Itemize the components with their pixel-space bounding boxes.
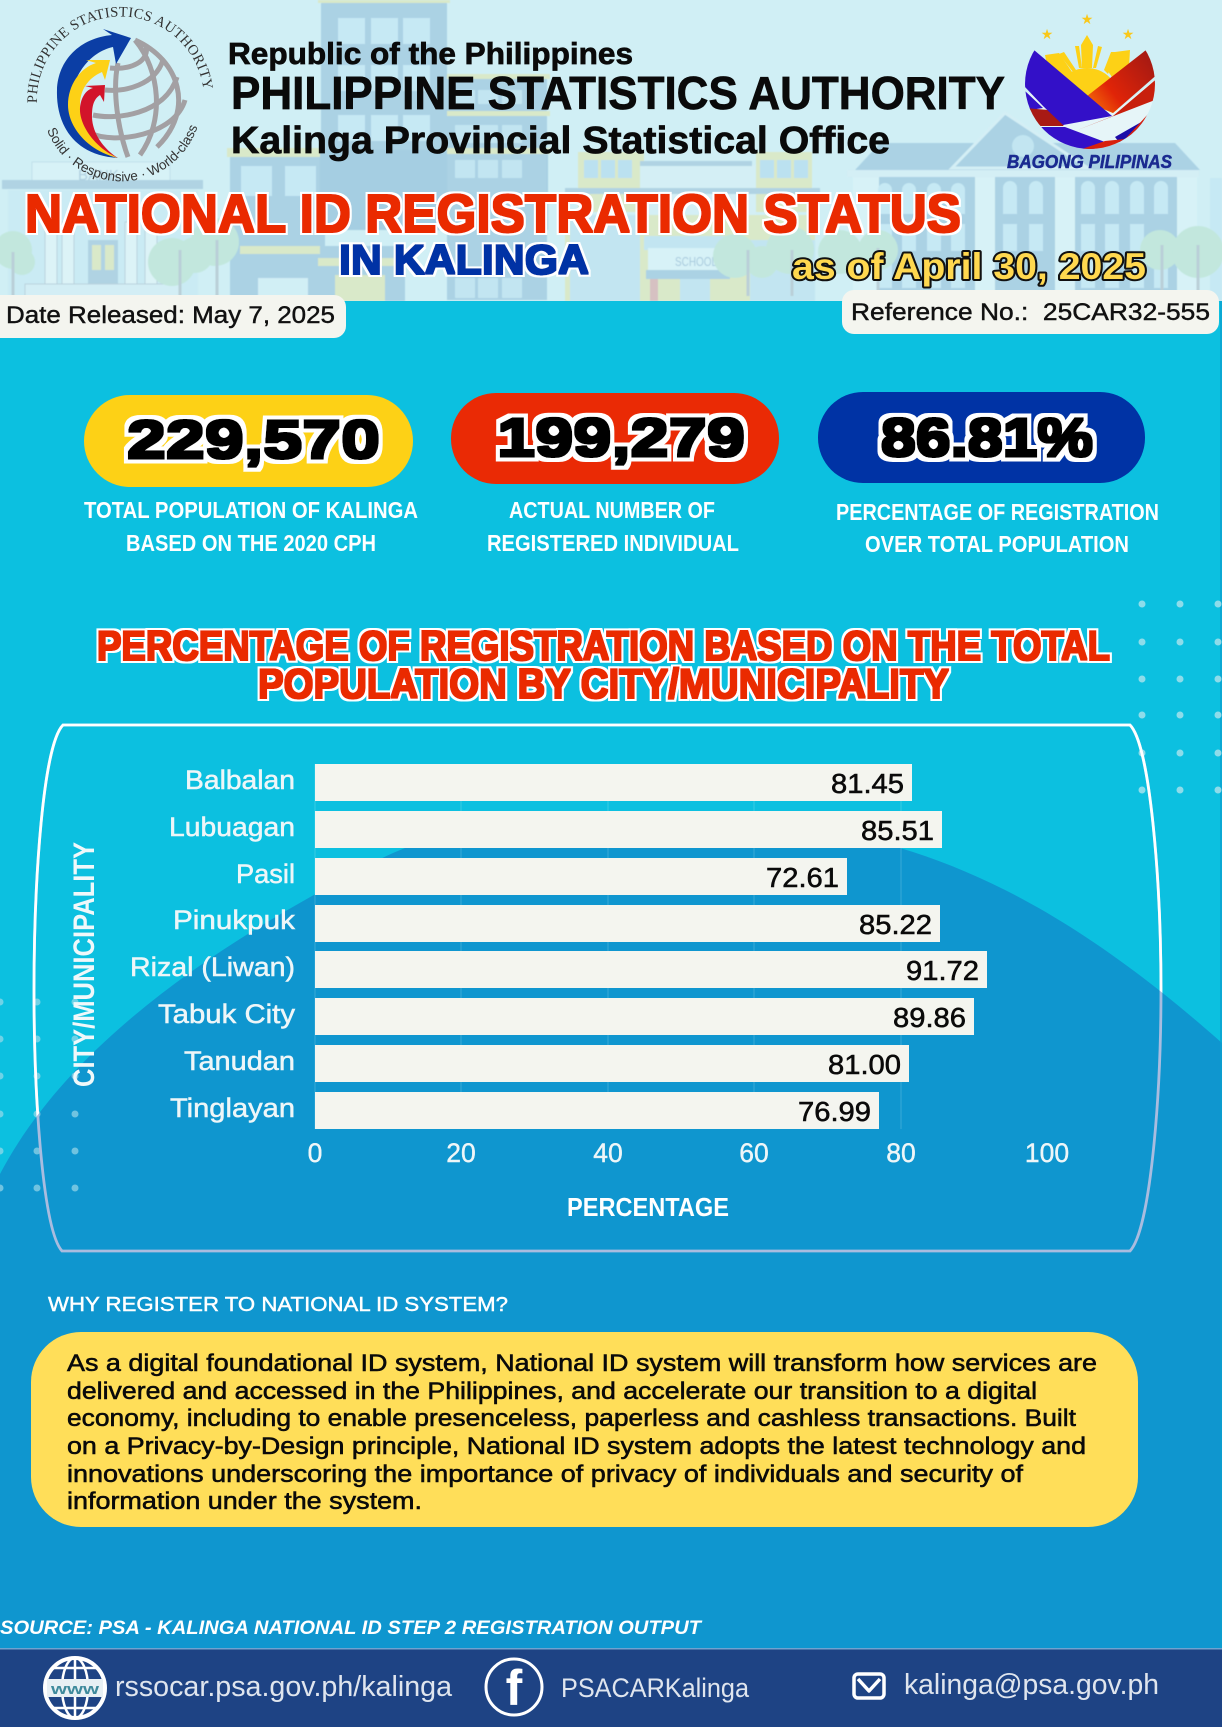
bar values: 85.22 xyxy=(859,909,932,940)
caption xyxy=(836,499,1159,557)
caption xyxy=(487,497,739,556)
icon: globe xyxy=(45,1658,105,1718)
value: 199,279 xyxy=(497,408,745,468)
callout text: delivered and accessed in the Philippines, and accelerate our transition to a digital xyxy=(67,1378,1037,1405)
background dome xyxy=(0,827,1222,1727)
x axis title: PERCENTAGE xyxy=(567,1192,729,1222)
bank xyxy=(2,162,203,300)
office line: Kalinga Provincial Statistical Office xyxy=(231,120,890,162)
grid lines xyxy=(315,764,901,1129)
stars xyxy=(1041,11,1134,42)
header city skyline background xyxy=(0,0,1222,301)
middle tower xyxy=(240,74,550,301)
bank: BANK xyxy=(78,167,119,184)
x axis ticks: 0 xyxy=(308,1138,322,1168)
callout text xyxy=(67,1350,1097,1515)
republic line: Republic of the Philippines xyxy=(228,36,633,71)
callout text: economy, including to enable presenceless, paperless and cashless transactions. Built xyxy=(67,1405,1076,1432)
stars: ★ xyxy=(1081,11,1093,27)
bands xyxy=(1025,50,1155,149)
value: 86.81% xyxy=(881,408,1093,468)
pill xyxy=(818,392,1145,483)
callout text: information under the system. xyxy=(67,1488,422,1515)
category labels xyxy=(130,765,296,1123)
callout text: innovations underscoring the importance of privacy of individuals and security of xyxy=(67,1461,1023,1488)
caption: REGISTERED INDIVIDUAL xyxy=(487,530,739,556)
x axis ticks: 20 xyxy=(446,1138,476,1168)
stat: percentage registered xyxy=(818,392,1159,557)
value: 229,570 xyxy=(127,410,380,470)
category labels: Pasil xyxy=(236,859,295,889)
pill xyxy=(84,395,413,487)
logo globe xyxy=(90,40,185,157)
agency line: PHILIPPINE STATISTICS AUTHORITY xyxy=(231,67,1005,119)
x axis ticks xyxy=(308,1138,1069,1168)
reference number pill: Reference No.: 25CAR32-555 xyxy=(851,299,1210,326)
caption: ACTUAL NUMBER OF xyxy=(509,497,715,523)
Bagong Pilipinas logo xyxy=(1007,11,1172,172)
icon: globe: www xyxy=(50,1681,99,1698)
why register heading: WHY REGISTER TO NATIONAL ID SYSTEM? xyxy=(48,1293,508,1316)
x axis ticks: 40 xyxy=(593,1138,623,1168)
caption: TOTAL POPULATION OF KALINGA xyxy=(84,497,418,523)
decorative dots right xyxy=(1138,600,1222,794)
pill xyxy=(451,393,779,484)
caption: OVER TOTAL POPULATION xyxy=(865,531,1129,557)
x axis ticks: 100 xyxy=(1025,1138,1069,1168)
caption: BASED ON THE 2020 CPH xyxy=(126,530,376,556)
stars: ★ xyxy=(1122,26,1134,42)
bar values: 81.00 xyxy=(828,1049,901,1080)
caption: PERCENTAGE OF REGISTRATION xyxy=(836,499,1159,525)
stat: total population xyxy=(84,395,418,556)
caption xyxy=(84,497,418,556)
footer bar xyxy=(0,1648,1222,1727)
school xyxy=(565,152,820,301)
chart heading: POPULATION BY CITY/MUNICIPALITY xyxy=(258,660,949,707)
subtitle: IN KALINGA xyxy=(339,236,589,283)
reference number pill xyxy=(842,290,1219,334)
callout box xyxy=(31,1332,1138,1527)
bar values: 91.72 xyxy=(906,955,979,986)
chart frame xyxy=(34,725,1161,1251)
icon: facebook: f xyxy=(506,1660,523,1716)
category labels: Pinukpuk xyxy=(173,905,296,935)
as-of date: as of April 30, 2025 xyxy=(792,246,1146,287)
bar values xyxy=(766,768,979,1127)
header text xyxy=(228,36,1005,162)
x axis ticks: 80 xyxy=(886,1138,916,1168)
main title: NATIONAL ID REGISTRATION STATUS xyxy=(25,184,961,244)
website: rssocar.psa.gov.ph/kalinga xyxy=(115,1671,453,1703)
bars xyxy=(315,764,987,1129)
sun xyxy=(1045,35,1130,132)
category labels: Balbalan xyxy=(185,765,295,795)
bar values: 81.45 xyxy=(831,768,904,799)
category labels: Tanudan xyxy=(184,1046,295,1076)
facebook handle: PSACARKalinga xyxy=(561,1673,750,1703)
PSA logo xyxy=(27,6,213,182)
why register callout xyxy=(31,1332,1138,1527)
logo arrows xyxy=(57,29,131,158)
callout text: on a Privacy-by-Design principle, National ID system adopts the latest technology and xyxy=(67,1433,1086,1460)
category labels: Tabuk City xyxy=(158,999,296,1029)
bar values: 89.86 xyxy=(893,1002,966,1033)
x axis ticks: 60 xyxy=(739,1138,769,1168)
bar values: 76.99 xyxy=(798,1096,871,1127)
right page edge xyxy=(1220,301,1222,1648)
chart heading xyxy=(97,622,1110,707)
icon: mail xyxy=(854,1674,884,1698)
callout text: As a digital foundational ID system, National ID system will transform how services are xyxy=(67,1350,1097,1377)
logo circular text: PHILIPPINE STATISTICS AUTHORITY xyxy=(27,6,213,103)
school: SCHOOL xyxy=(675,254,717,269)
decorative dots left xyxy=(0,998,78,1192)
icon: facebook xyxy=(486,1659,542,1716)
left block xyxy=(227,148,325,301)
y axis title: CITY/MUNICIPALITY xyxy=(68,842,101,1087)
bar values: 72.61 xyxy=(766,862,839,893)
header sky xyxy=(0,0,1222,301)
government building xyxy=(847,113,1222,301)
date released pill: Date Released: May 7, 2025 xyxy=(6,302,335,329)
logo circular text: Solid · Responsive · World-class xyxy=(48,125,197,182)
stars: ★ xyxy=(1041,26,1053,42)
category labels: Rizal (Liwan) xyxy=(130,952,295,982)
tower xyxy=(318,0,450,170)
category labels: Tinglayan xyxy=(170,1093,295,1123)
email: kalinga@psa.gov.ph xyxy=(904,1669,1159,1701)
category labels: Lubuagan xyxy=(169,812,295,842)
logo circular text xyxy=(27,6,213,182)
bar values: 85.51 xyxy=(861,815,934,846)
bagong pilipinas label: BAGONG PILIPINAS xyxy=(1007,152,1172,172)
source note: SOURCE: PSA - KALINGA NATIONAL ID STEP 2 REGISTRATION OUTPUT xyxy=(0,1618,702,1639)
trees xyxy=(0,218,1222,296)
stat: registered individuals xyxy=(451,393,779,556)
date released pill xyxy=(0,295,346,338)
bar chart xyxy=(68,764,1069,1222)
